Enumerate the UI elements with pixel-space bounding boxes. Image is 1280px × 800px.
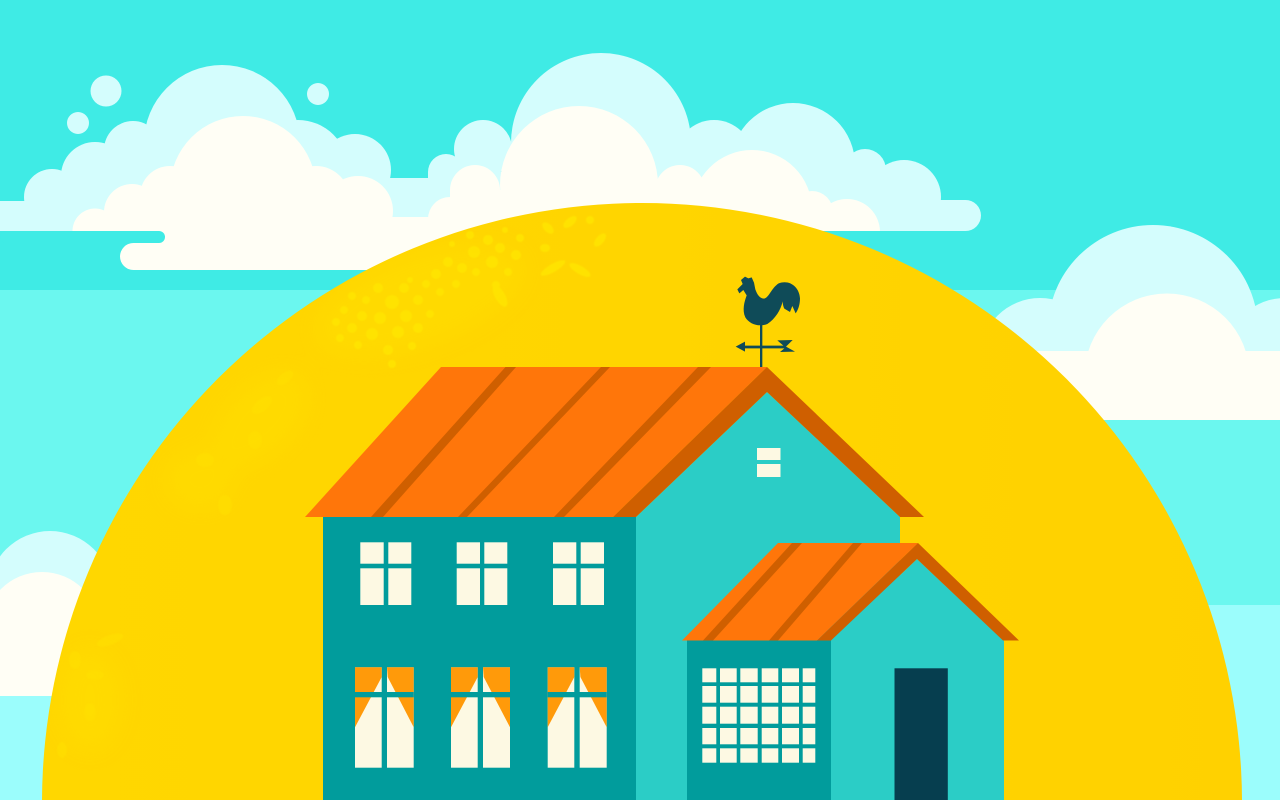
cloud: top left, back layer bbox=[0, 65, 450, 231]
sun texture bbox=[57, 214, 608, 758]
upper floor windows bbox=[360, 542, 604, 605]
grid window bbox=[702, 668, 816, 763]
weather vane: rooster bbox=[736, 277, 800, 367]
cloud: lower left bbox=[0, 531, 97, 696]
front extension: light wall bbox=[831, 559, 1004, 800]
vane arrow bbox=[736, 340, 795, 352]
front extension roof bbox=[682, 543, 1019, 640]
attic window bbox=[757, 448, 780, 477]
front extension: dark wall bbox=[687, 640, 831, 800]
door bbox=[894, 668, 948, 800]
sun bbox=[42, 203, 1242, 800]
main roof bbox=[305, 367, 924, 517]
vane pole bbox=[760, 323, 762, 367]
cloud: right bbox=[995, 225, 1280, 420]
main house: light wall bbox=[636, 392, 900, 800]
rooster silhouette bbox=[737, 277, 800, 325]
cloud: top centre, back layer bbox=[428, 53, 981, 234]
ground floor window 2 with curtains bbox=[451, 667, 510, 768]
sky notch between cloud layers bbox=[0, 231, 165, 243]
ground floor window 1 with curtains bbox=[355, 667, 414, 768]
main house: dark wall bbox=[323, 517, 636, 800]
house bbox=[305, 367, 1019, 800]
ground floor window 3 with curtains bbox=[548, 667, 607, 768]
cloud: top left and centre, front layer bbox=[72, 106, 880, 270]
